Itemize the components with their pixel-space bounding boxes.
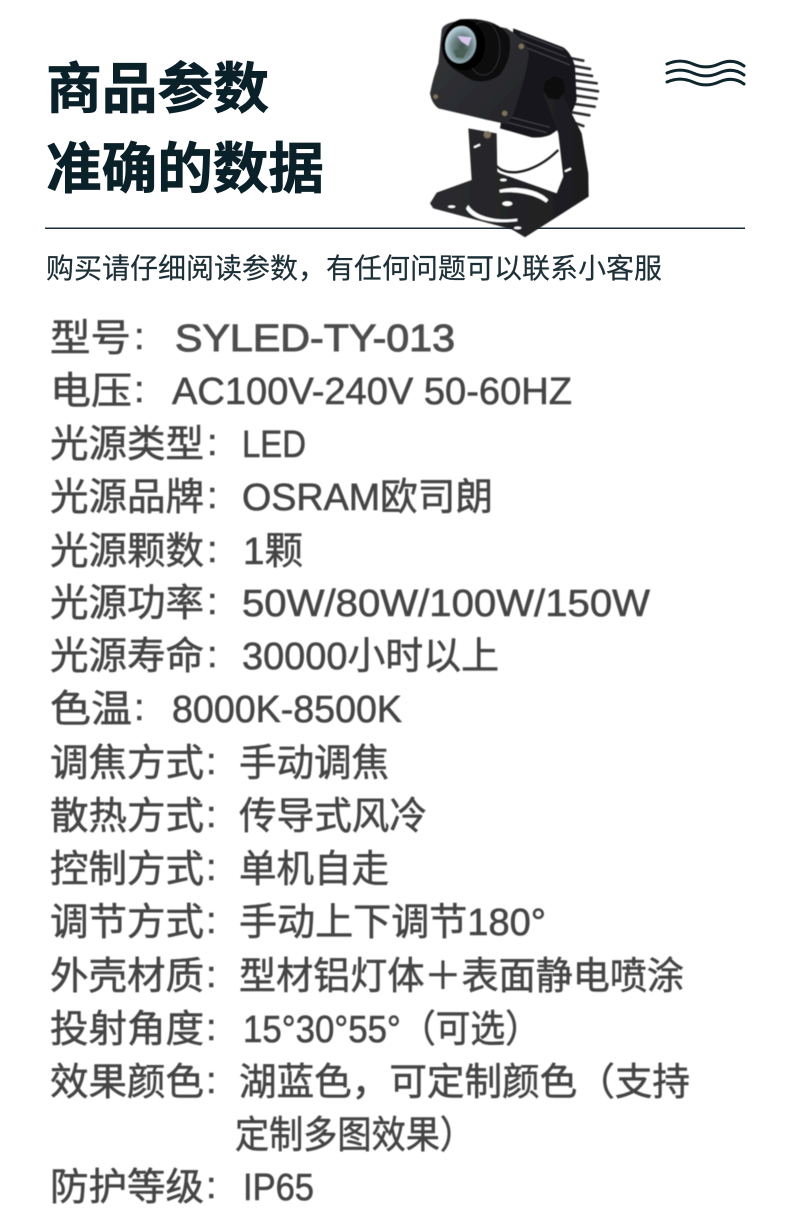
row: 防护等级: 防护等级: [50, 1167, 204, 1209]
mounting bracket with slots: [430, 90, 589, 237]
row: 防护等级: IP65: [243, 1167, 314, 1209]
row: 控制方式: [50, 847, 389, 891]
row: 调焦方式: 手动调焦: [239, 743, 389, 785]
row: 光源寿命: [50, 634, 499, 678]
title: 商品参数 准确的数据: 商品参数: [46, 58, 269, 120]
header divider line: [45, 228, 745, 229]
row: 色温: [50, 687, 402, 731]
row: 调节方式: :: [206, 900, 217, 942]
row: 调节方式: 手动上下调节180°: [239, 902, 546, 944]
row: 光源品牌: 光源品牌: [50, 477, 204, 519]
front cover: [430, 20, 529, 124]
row: 效果颜色: 湖蓝色，可定制颜色（支持: [239, 1062, 690, 1104]
cable: [486, 135, 558, 172]
row: 效果颜色: :: [206, 1060, 217, 1102]
row: 型号: :: [134, 316, 145, 358]
heat sink fins: [567, 57, 598, 126]
row: 光源颗数: 1颗: [243, 531, 303, 573]
row: 光源寿命: 光源寿命: [50, 636, 204, 678]
row: 散热方式: 散热方式: [50, 796, 204, 838]
row: 外壳材质: 外壳材质: [50, 956, 204, 998]
row: 光源类型: 光源类型: [50, 424, 204, 466]
row: 防护等级: [50, 1165, 314, 1209]
row: 调节方式: [50, 900, 546, 944]
row: 光源功率: :: [207, 581, 218, 623]
row: 光源功率: [50, 581, 650, 625]
row: 效果颜色: [50, 1060, 690, 1157]
row: 控制方式: :: [206, 847, 217, 889]
row: 投射角度: 投射角度: [50, 1009, 204, 1051]
screws: [433, 44, 524, 138]
title: 商品参数 准确的数据: [46, 58, 324, 200]
row: 光源寿命: :: [207, 634, 218, 676]
row: 散热方式: [50, 794, 427, 838]
row: 型号: [50, 316, 455, 360]
row: 调节方式: 调节方式: [50, 902, 204, 944]
row: 效果颜色: 定制多图效果）: [235, 1115, 474, 1157]
row: 投射角度: 15°30°55°（可选）: [243, 1009, 540, 1051]
row: 调焦方式: 调焦方式: [50, 743, 204, 785]
lens glass: [442, 24, 479, 66]
subtitle note: 购买请仔细阅读参数，有任何问题可以联系小客服: [46, 253, 662, 284]
row: 散热方式: :: [206, 794, 217, 836]
row: 光源品牌: OSRAM欧司朗: [242, 477, 493, 519]
row: 外壳材质: 型材铝灯体＋表面静电喷涂: [239, 956, 684, 998]
knob: [543, 76, 565, 99]
row: 电压: AC100V-240V 50-60HZ: [172, 371, 572, 413]
title: 商品参数 准确的数据: 准确的数据: [46, 138, 324, 200]
row: 投射角度: :: [206, 1007, 217, 1049]
row: 光源颗数: :: [207, 529, 218, 571]
cylinder housing: [500, 28, 577, 138]
row: 光源类型: [50, 422, 306, 466]
row: 光源寿命: 30000小时以上: [242, 636, 499, 678]
row: 防护等级: :: [206, 1165, 217, 1207]
row: 色温: 色温: [50, 689, 132, 731]
row: 光源功率: 光源功率: [50, 583, 204, 625]
row: 光源品牌: [50, 475, 493, 519]
row: 电压: 电压: [50, 371, 132, 413]
row: 散热方式: 传导式风冷: [239, 796, 427, 838]
row: 调焦方式: :: [206, 741, 217, 783]
row: 色温: 8000K-8500K: [172, 689, 402, 731]
row: 电压: :: [134, 369, 145, 411]
lens barrel: [442, 19, 510, 82]
row: 投射角度: [50, 1007, 540, 1051]
row: 色温: :: [134, 687, 145, 729]
row: 光源类型: LED: [242, 424, 306, 466]
row: 外壳材质: :: [206, 954, 217, 996]
row: 光源品牌: :: [207, 475, 218, 517]
row: 光源颗数: 光源颗数: [50, 531, 204, 573]
product photo: gobo projector light: [430, 19, 598, 237]
row: 控制方式: 控制方式: [50, 849, 204, 891]
row: 光源颗数: [50, 529, 303, 573]
icon: three waves: [667, 61, 744, 85]
row: 光源类型: :: [207, 422, 218, 464]
row: 控制方式: 单机自走: [239, 849, 389, 891]
row: 效果颜色: 效果颜色: [50, 1062, 204, 1104]
row: 外壳材质: [50, 954, 684, 998]
row: 型号: SYLED-TY-013: [175, 318, 455, 360]
row: 调焦方式: [50, 741, 389, 785]
row: 光源功率: 50W/80W/100W/150W: [242, 583, 650, 625]
parameter list: [50, 316, 690, 1209]
row: 型号: 型号: [50, 318, 131, 360]
